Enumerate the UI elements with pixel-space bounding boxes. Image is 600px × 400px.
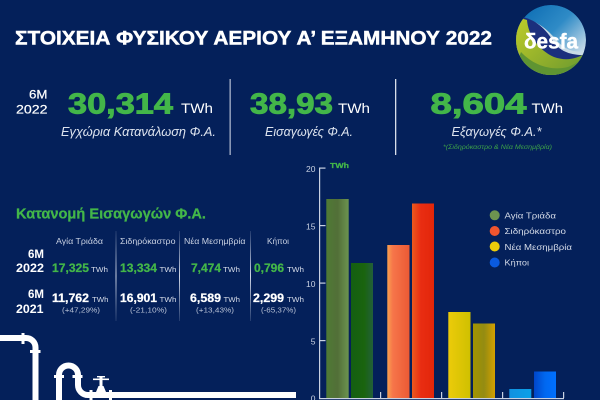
period label 6M 2022 — [16, 88, 48, 116]
table row: 6M 2021: TWh — [287, 297, 304, 304]
KPI: imports: 38,93 — [250, 88, 333, 120]
table row: 6M 2021: (-21,10%) — [130, 306, 168, 314]
table header: Αγία Τριάδα — [56, 237, 103, 246]
table row: 6M 2022: 7,474 — [191, 261, 221, 275]
KPI: exports: TWh — [532, 100, 563, 116]
table row: 6M 2021: (-65,37%) — [261, 306, 297, 314]
KPI: exports: Εξαγωγές Φ.Α.* — [452, 125, 543, 139]
table row: 6M 2021: 6,589 — [190, 291, 221, 305]
KPI: domestic consumption: 30,314 — [68, 88, 173, 120]
KPI: exports — [430, 88, 563, 151]
chart legend: Νέα Μεσημβρία — [504, 242, 572, 252]
chart legend: Σιδηρόκαστρο — [504, 226, 566, 236]
KPI: imports: Εισαγωγές Φ.Α. — [265, 125, 353, 139]
table row: 6M 2021: TWh — [160, 297, 177, 304]
KPI: exports: *(Σιδηρόκαστρο & Νέα Μεσημβρία) — [443, 144, 552, 151]
section heading: import distribution: Κατανομή Εισαγωγών Φ.Α. — [16, 206, 206, 222]
y axis — [319, 168, 564, 399]
KPI: imports — [250, 88, 370, 139]
KPI: domestic consumption — [61, 88, 216, 139]
KPI: exports: 8,604 — [430, 88, 526, 120]
icon: gas pipeline — [0, 333, 296, 400]
chart legend: Κήποι — [504, 258, 529, 268]
y axis labels: 10 — [306, 279, 316, 289]
table row: 6M 2022: 17,325 — [52, 261, 89, 275]
table row: 6M 2022: 6Μ — [28, 249, 44, 261]
table row: 6M 2021: 2021 — [16, 304, 44, 316]
bars: Κήποι — [509, 372, 556, 398]
table row: 6M 2021 — [16, 289, 304, 316]
bars: Αγία Τριάδα — [326, 199, 373, 398]
table row: 6M 2022: 13,334 — [120, 261, 157, 275]
period label 6M 2022: 6Μ — [29, 88, 48, 102]
table row: 6M 2022: TWh — [287, 267, 304, 274]
table row: 6M 2021: 16,901 — [120, 291, 157, 305]
table row: 6M 2022: 2022 — [16, 263, 44, 275]
title: ΣΤΟΙΧΕΙΑ ΦΥΣΙΚΟΥ ΑΕΡΙΟΥ Α’ ΕΞΑΜΗΝΟΥ 2022 — [15, 28, 492, 50]
imports table — [16, 231, 304, 321]
table row: 6M 2021: (+47,29%) — [62, 306, 101, 314]
table header: Σιδηρόκαστρο — [120, 237, 176, 246]
table header: Κήποι — [267, 237, 289, 246]
table row: 6M 2022: TWh — [223, 267, 240, 274]
table row: 6M 2021: 11,762 — [52, 291, 89, 305]
table row: 6M 2021: TWh — [92, 297, 109, 304]
table header: Νέα Μεσημβρία — [184, 237, 246, 246]
y axis labels: 20 — [306, 164, 316, 174]
KPI: imports: TWh — [338, 100, 370, 116]
table row: 6M 2021: TWh — [224, 297, 240, 304]
table row: 6M 2022: TWh — [160, 267, 177, 274]
bars: Νέα Μεσημβρία — [448, 312, 495, 398]
table row: 6M 2021: (+13,43%) — [196, 306, 235, 314]
table row: 6M 2021: 2,299 — [253, 291, 284, 305]
y axis labels — [306, 164, 316, 400]
unit label: TWh — [330, 163, 349, 170]
y axis labels: 5 — [311, 336, 316, 346]
table row: 6M 2021: 6Μ — [28, 289, 44, 301]
icon: desfa logo: δesfa — [524, 30, 578, 54]
period label 6M 2022: 2022 — [16, 102, 48, 116]
KPI: domestic consumption: Εγχώρια Κατανάλωση Φ.Α. — [61, 125, 216, 139]
KPI: domestic consumption: TWh — [181, 100, 213, 116]
bar chart — [306, 163, 564, 400]
chart legend — [490, 210, 572, 268]
table header — [56, 237, 289, 246]
chart legend: Αγία Τριάδα — [504, 210, 556, 220]
icon: desfa logo — [516, 5, 586, 75]
table row: 6M 2022: 0,796 — [254, 261, 284, 275]
table row: 6M 2022: TWh — [91, 267, 108, 274]
bars: Σιδηρόκαστρο — [387, 204, 434, 398]
table row: 6M 2022 — [16, 249, 304, 275]
y axis labels: 15 — [306, 222, 316, 232]
